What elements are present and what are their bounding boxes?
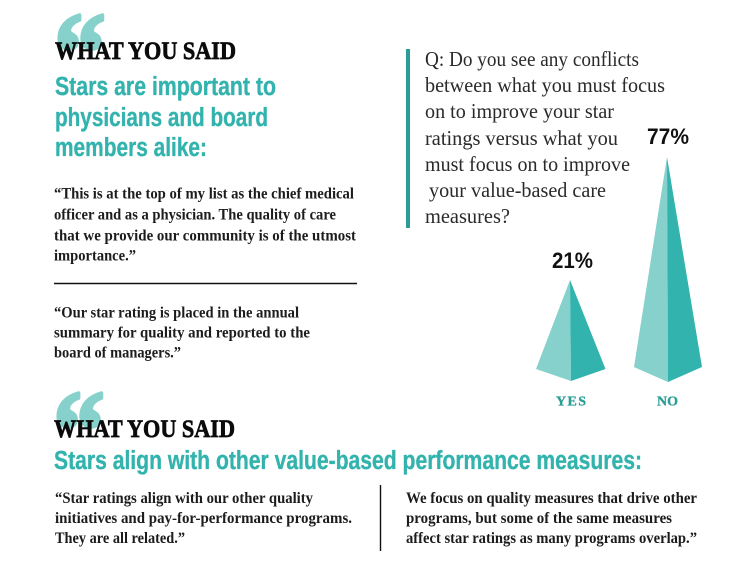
panel: stars align bbox=[53, 369, 697, 551]
chart: no pyramid 77%: 77% bbox=[647, 124, 689, 149]
chart: no pyramid 77%: NO bbox=[657, 394, 678, 410]
panel: survey question bbox=[406, 47, 702, 410]
subheading: stars are important: physicians and board bbox=[55, 104, 268, 132]
question text: Q: Do you see any conflicts bbox=[425, 47, 639, 71]
quote: chief medical officer: importance.” bbox=[54, 248, 136, 264]
question text bbox=[425, 47, 665, 228]
quote: board of managers bbox=[54, 304, 310, 362]
quote: board of managers: “Our star rating is placed in the annual bbox=[54, 304, 300, 322]
quote: chief medical officer: that we provide our community is of the utmost bbox=[54, 228, 357, 244]
quote: right: programs, but some of the same measures bbox=[406, 510, 672, 527]
question text: ratings versus what you bbox=[425, 126, 618, 150]
quote: chief medical officer: officer and as a physician. The quality of care bbox=[54, 206, 336, 224]
quote: right: We focus on quality measures that drive other bbox=[406, 490, 697, 507]
quote: right bbox=[406, 490, 697, 547]
heading: what you said: WHAT YOU SAID bbox=[54, 416, 235, 443]
subheading: stars are important bbox=[55, 73, 276, 162]
subheading: stars are important: members alike: bbox=[55, 134, 207, 162]
quote: chief medical officer: “This is at the top of my list as the chief medical bbox=[54, 186, 355, 202]
quote: right: affect star ratings as many programs overlap.” bbox=[406, 530, 697, 547]
accent bar bbox=[406, 49, 410, 228]
quote: left bbox=[55, 490, 352, 547]
quote: board of managers: summary for quality and reported to the bbox=[54, 324, 310, 342]
chart: yes pyramid 21% bbox=[536, 248, 606, 410]
quote: board of managers: board of managers.” bbox=[54, 344, 181, 362]
subheading: stars are important: Stars are important to bbox=[55, 73, 276, 101]
subheading: stars align: Stars align with other value-based performance measures: bbox=[54, 447, 642, 475]
chart: yes pyramid 21%: YES bbox=[556, 394, 586, 410]
heading: what you said: WHAT YOU SAID bbox=[55, 38, 236, 65]
quote: chief medical officer bbox=[54, 186, 357, 264]
panel: stars are important bbox=[54, 0, 357, 362]
quote: left: initiatives and pay-for-performance programs. bbox=[55, 510, 352, 527]
quote: left: They are all related.” bbox=[55, 530, 185, 547]
quote: left: “Star ratings align with our other quality bbox=[55, 490, 313, 507]
chart: yes pyramid 21%: 21% bbox=[552, 248, 593, 273]
question text: measures? bbox=[425, 204, 510, 228]
icon: quotation mark: “ bbox=[53, 369, 105, 493]
question text: must focus on to improve bbox=[425, 152, 630, 176]
chart: no pyramid 77% bbox=[634, 124, 702, 410]
question text: your value-based care bbox=[429, 178, 606, 202]
question text: on to improve your star bbox=[425, 99, 614, 123]
question text: between what you must focus bbox=[425, 73, 665, 97]
